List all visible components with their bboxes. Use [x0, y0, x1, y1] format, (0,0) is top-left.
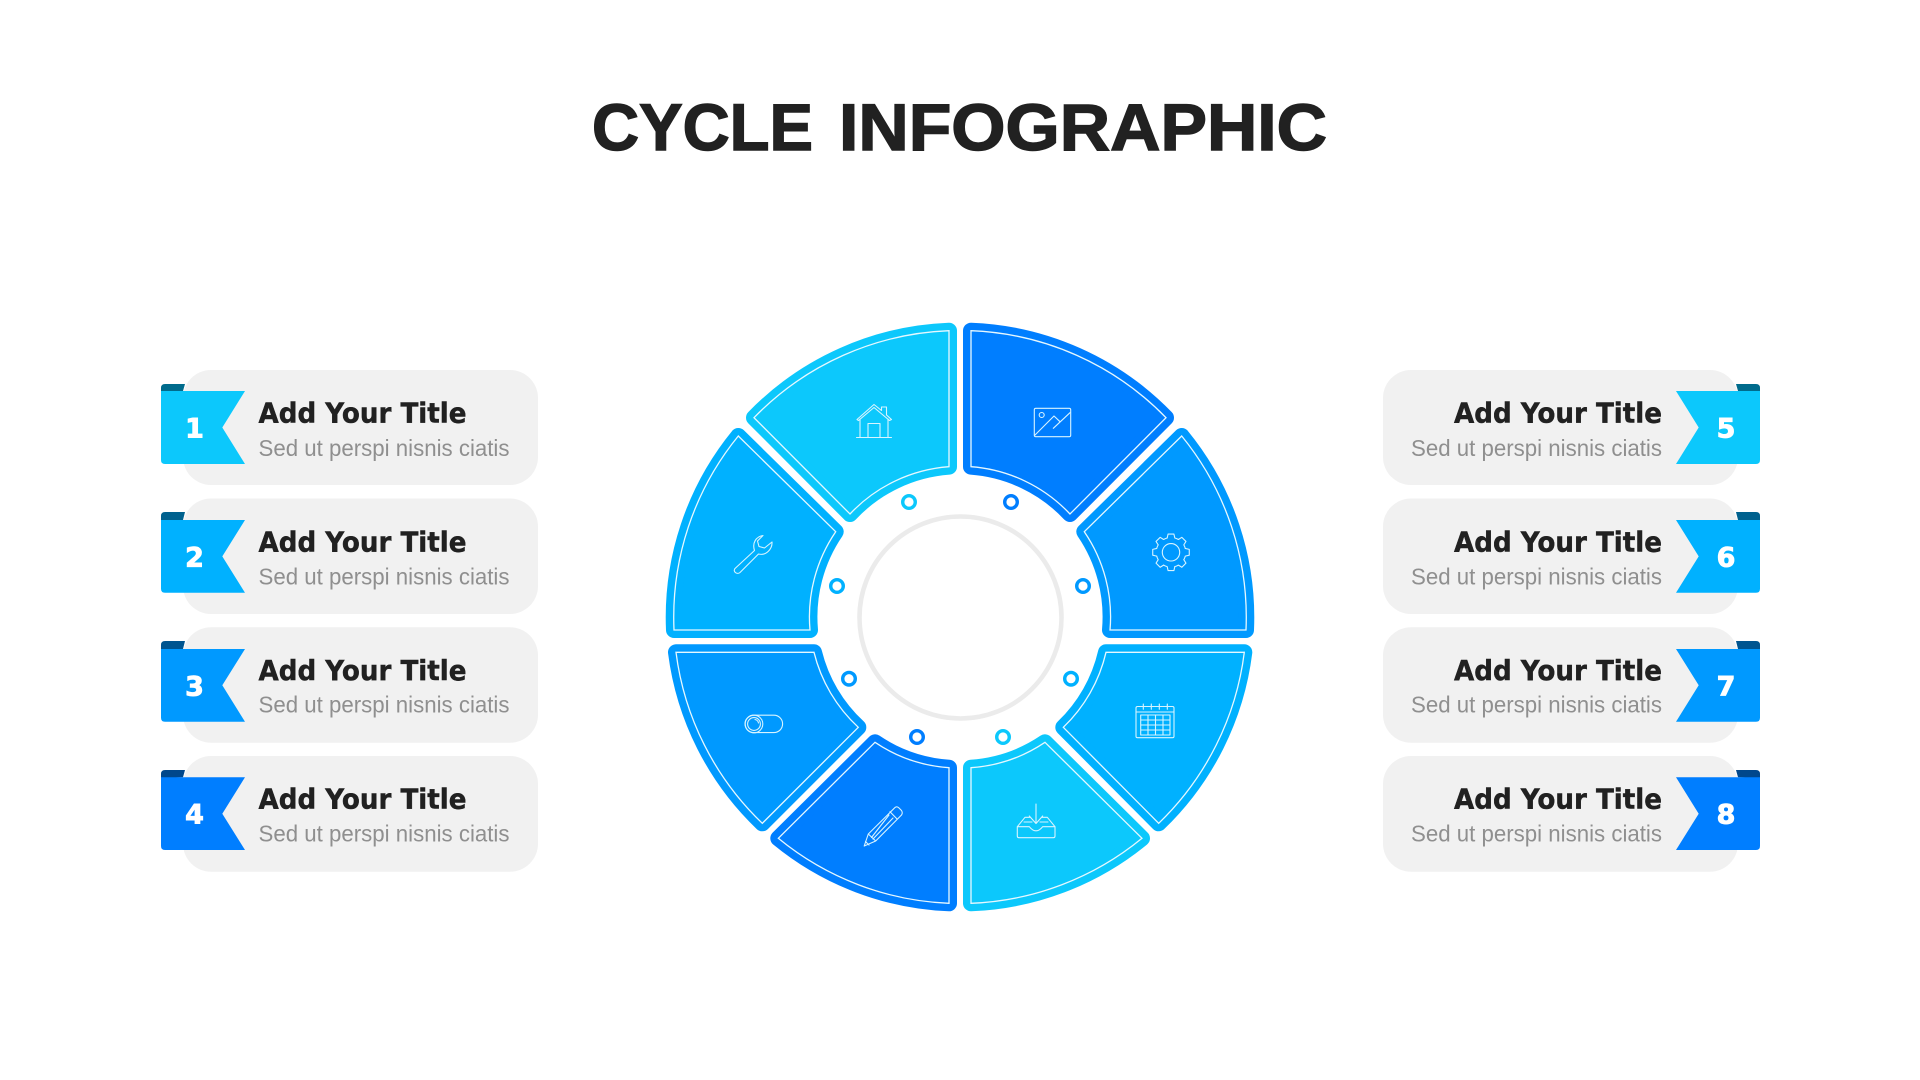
panel: item 7 [1383, 627, 1760, 743]
segment: inbox [971, 742, 1142, 903]
segment: home [754, 331, 949, 514]
segment: wrench [674, 436, 836, 630]
cycle chart [674, 331, 1246, 903]
item description: Sed ut perspi nisnis ciatis [1411, 564, 1662, 590]
connector dot 1 [903, 496, 915, 508]
number: 6 [1717, 542, 1735, 573]
panel: item 1 [161, 370, 538, 485]
icon: pencil [864, 807, 902, 846]
card background [1383, 498, 1738, 614]
connector dot 2 [831, 580, 843, 592]
title [592, 90, 1327, 164]
connector dot 6 [1077, 580, 1089, 592]
ribbon [161, 391, 245, 464]
number: 3 [185, 671, 204, 702]
connector dot 7 [1065, 672, 1077, 685]
item title: Add Your Title [1454, 397, 1662, 430]
connector dot 8 [997, 731, 1009, 743]
number: 4 [185, 800, 204, 831]
card background [1383, 627, 1738, 743]
item description: Sed ut perspi nisnis ciatis [258, 692, 510, 718]
ribbon [1676, 520, 1760, 593]
card background [183, 627, 538, 743]
connector dot 3 [843, 672, 855, 685]
icon: toggle switch [745, 715, 783, 733]
ribbon tab [1736, 512, 1760, 521]
icon: gear [1153, 534, 1189, 571]
card background [183, 370, 538, 485]
connector dot 5 [1005, 496, 1017, 508]
segment: toggle [676, 652, 858, 823]
icon: wrench [734, 536, 772, 573]
number: 1 [185, 414, 204, 444]
ribbon tab [161, 641, 185, 650]
icon: picture [1034, 408, 1071, 437]
connector dot 4 [911, 731, 923, 743]
ribbon tab [161, 770, 185, 778]
ribbon tab [161, 512, 185, 521]
item description: Sed ut perspi nisnis ciatis [1411, 820, 1662, 846]
item title: Add Your Title [258, 526, 466, 559]
ribbon tab [161, 384, 185, 392]
item description: Sed ut perspi nisnis ciatis [258, 564, 510, 590]
panel: item 8 [1383, 756, 1760, 872]
item description: Sed ut perspi nisnis ciatis [258, 435, 510, 461]
number: 8 [1717, 800, 1735, 831]
icon: calendar [1136, 704, 1174, 738]
segment: picture [971, 331, 1166, 514]
ribbon tab [1736, 641, 1760, 650]
card background [183, 756, 538, 872]
panel: item 2 [161, 498, 538, 614]
card background [1383, 756, 1738, 872]
card background [183, 498, 538, 614]
number: 2 [185, 542, 204, 573]
segment: gear [1084, 436, 1246, 630]
segment: pencil [778, 742, 949, 903]
ribbon [161, 649, 245, 722]
ribbon [1676, 777, 1760, 850]
panel: item 6 [1383, 498, 1760, 614]
segment: calendar [1063, 652, 1244, 823]
ribbon [1676, 649, 1760, 722]
panel: item 4 [161, 756, 538, 872]
item title: Add Your Title [1454, 526, 1662, 559]
center ring [860, 516, 1062, 718]
icon: house [856, 404, 892, 438]
panel: item 3 [161, 627, 538, 743]
item title: Add Your Title [1454, 654, 1662, 687]
item description: Sed ut perspi nisnis ciatis [1411, 692, 1662, 718]
item title: Add Your Title [1454, 782, 1662, 816]
item title: Add Your Title [258, 654, 466, 687]
item title: Add Your Title [258, 397, 466, 430]
card background [1383, 370, 1738, 485]
number: 7 [1717, 671, 1735, 702]
item description: Sed ut perspi nisnis ciatis [1411, 435, 1662, 461]
item description: Sed ut perspi nisnis ciatis [258, 820, 510, 846]
title: CYCLE [592, 90, 813, 164]
panel: item 5 [1383, 370, 1760, 485]
icon: inbox [1017, 804, 1055, 838]
ribbon [161, 777, 245, 850]
title: INFOGRAPHIC [839, 90, 1327, 164]
item title: Add Your Title [258, 782, 466, 816]
ribbon tab [1736, 384, 1760, 392]
ribbon [1676, 391, 1760, 464]
ribbon [161, 520, 245, 593]
number: 5 [1717, 414, 1735, 444]
ribbon tab [1736, 770, 1760, 778]
